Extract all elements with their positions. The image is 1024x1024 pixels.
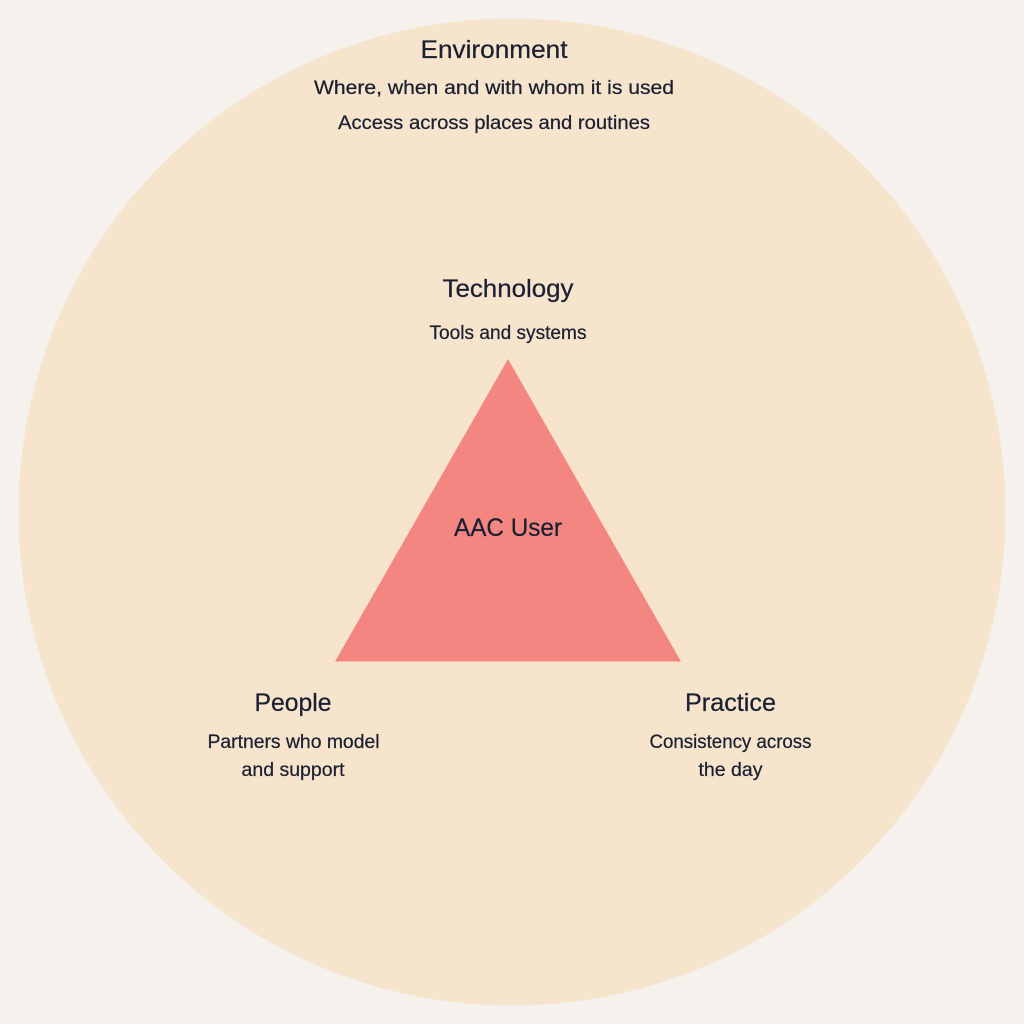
heading: Practice: Practice xyxy=(685,689,776,717)
center triangle xyxy=(335,359,681,662)
text: people line 2: and support xyxy=(242,760,345,781)
text: environment line 2: Access across places and routines xyxy=(338,113,650,134)
text: environment line 1: Where, when and with whom it is used xyxy=(314,78,674,99)
heading: Technology: Technology xyxy=(442,275,574,303)
text: people line 1: Partners who model xyxy=(208,732,380,753)
label: AAC User: AAC User xyxy=(454,514,562,542)
text: practice line 2: the day xyxy=(698,760,763,781)
text: technology description: Tools and systems xyxy=(430,323,586,344)
text: practice line 1: Consistency across xyxy=(650,732,812,753)
heading: People: People xyxy=(254,689,332,717)
heading: Environment: Environment xyxy=(420,36,568,64)
